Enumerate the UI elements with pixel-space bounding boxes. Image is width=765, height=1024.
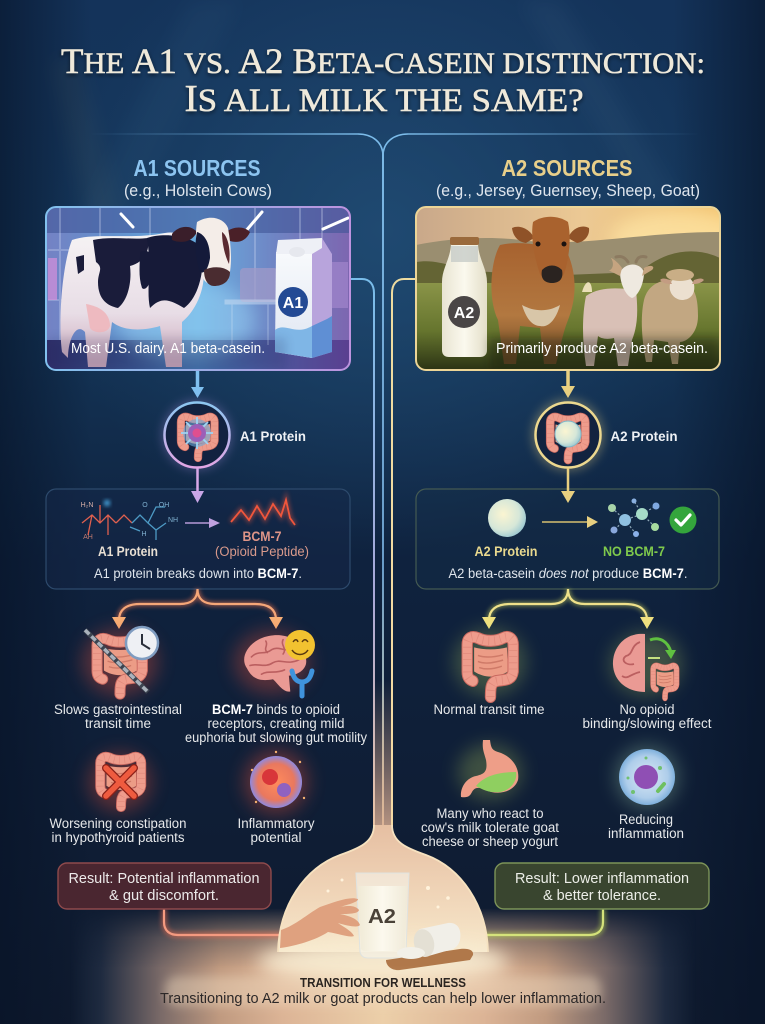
icon: brain and gut no effect bbox=[610, 632, 682, 698]
icon: A1 milk carton: A1 bbox=[283, 295, 303, 312]
caption: Most U.S. dairy. A1 beta-casein. bbox=[71, 340, 265, 357]
icon: healthy cell bbox=[615, 745, 679, 809]
text: slows transit: Slows gastrointestinal bbox=[54, 702, 182, 717]
icon: cheese on board bbox=[386, 923, 473, 970]
icon: A1 protein circle bbox=[162, 400, 232, 470]
chart: A1 molecule: NH bbox=[168, 517, 178, 524]
callout: right result: Result: Lower inflammation bbox=[515, 871, 689, 887]
text: constipation: in hypothyroid patients bbox=[52, 830, 185, 845]
text: no opioid bbox=[582, 702, 712, 731]
icon: intestine with red X bbox=[88, 752, 152, 812]
arrow: A2 panel to protein bbox=[561, 371, 575, 398]
icon: inflammatory cell bbox=[244, 750, 308, 814]
arrow: A1 split branches bbox=[112, 589, 283, 629]
heading and text: transition for wellness: TRANSITION FOR WELLNESS bbox=[300, 976, 466, 990]
heading and text: transition for wellness bbox=[160, 976, 606, 1007]
callout: left result bbox=[58, 863, 271, 909]
transition strip between columns bbox=[374, 680, 392, 850]
panel: A2 sources photo bbox=[416, 207, 750, 370]
arrow: A1 protein to breakdown bbox=[191, 468, 204, 503]
text: constipation: Worsening constipation bbox=[50, 816, 186, 831]
A1 heading bbox=[124, 155, 272, 200]
icon: healthy intestine bbox=[454, 628, 526, 697]
panel: A2 breakdown: A2 Protein bbox=[474, 544, 538, 559]
panel: A1 breakdown: A1 protein breaks down into BCM-7. bbox=[94, 566, 302, 581]
title: IS ALL MILK THE SAME? bbox=[184, 78, 584, 120]
text: inflammatory: Inflammatory bbox=[238, 816, 315, 831]
panel: A2 breakdown: A2 beta-casein does not produce BCM-7. bbox=[448, 566, 688, 581]
top connector and central spine bbox=[90, 134, 700, 848]
icon: milk bottle bbox=[442, 237, 487, 357]
panel: A1 breakdown bbox=[46, 489, 350, 589]
text: no opioid: No opioid bbox=[620, 702, 674, 717]
text: no opioid: binding/slowing effect bbox=[582, 716, 712, 731]
title: THE A1 VS. A2 BETA-CASEIN DISTINCTION: bbox=[61, 41, 705, 81]
callout: right result: & better tolerance. bbox=[543, 888, 661, 904]
icon: goat bbox=[582, 257, 653, 366]
icon: Jersey cow bbox=[491, 217, 589, 364]
icon: A2 protein circle bbox=[532, 399, 604, 471]
text: slows transit: transit time bbox=[85, 716, 151, 731]
chart: A1 molecule: H bbox=[141, 531, 147, 538]
A2 heading bbox=[436, 155, 700, 200]
panel: A1 breakdown: (Opioid Peptide) bbox=[215, 544, 309, 559]
A2 heading: (e.g., Jersey, Guernsey, Sheep, Goat) bbox=[436, 181, 700, 200]
text: slows transit bbox=[54, 702, 182, 731]
text: inflammatory bbox=[238, 816, 315, 845]
callout: right result bbox=[495, 863, 709, 909]
caption: Primarily produce A2 beta-casein. bbox=[496, 340, 708, 357]
text: many tolerate: Many who react to bbox=[436, 806, 544, 821]
icon: A2 milk glass: A2 bbox=[368, 906, 396, 928]
text: BCM-7 binds: euphoria but slowing gut motility bbox=[185, 730, 367, 745]
chart: A1 molecule: O bbox=[142, 502, 148, 509]
text: BCM-7 binds: receptors, creating mild bbox=[208, 716, 344, 731]
arrow: left result to dome bbox=[164, 909, 282, 935]
label: A1 Protein: A1 Protein bbox=[240, 429, 306, 444]
icon: no BCM-7 molecules bbox=[608, 498, 660, 537]
A1 heading: A1 SOURCES bbox=[134, 155, 260, 181]
arrow: A2 protein to breakdown bbox=[561, 468, 575, 503]
arrow bbox=[185, 518, 220, 528]
text: BCM-7 binds bbox=[185, 702, 367, 745]
panel: A2 breakdown bbox=[416, 489, 719, 589]
panel: A1 sources photo bbox=[46, 207, 350, 370]
connector: A2 panel to dome bbox=[392, 279, 416, 835]
icon: sheep bbox=[642, 269, 704, 364]
panel: A2 breakdown: NO BCM-7 bbox=[603, 544, 665, 559]
text: many tolerate: cow's milk tolerate goat bbox=[421, 820, 559, 835]
heading and text: transition for wellness: Transitioning to A2 milk or goat products can help lower inflammation. bbox=[160, 990, 606, 1007]
title bbox=[61, 41, 705, 120]
panel: A1 breakdown: BCM-7 bbox=[242, 529, 282, 544]
panel: wellness dome bbox=[258, 825, 508, 984]
arrow: A1 panel to protein bbox=[191, 371, 204, 398]
text: reducing bbox=[608, 812, 684, 841]
label: A2 Protein: A2 Protein bbox=[610, 429, 678, 444]
text: reducing: Reducing bbox=[619, 812, 673, 827]
icon: A2 milk glass bbox=[356, 873, 409, 958]
chart: A1 molecule: H₂N bbox=[81, 502, 93, 509]
A2 heading: A2 SOURCES bbox=[502, 155, 632, 181]
text: constipation bbox=[50, 816, 186, 845]
callout: left result: Result: Potential inflammation bbox=[68, 871, 260, 887]
text: many tolerate bbox=[421, 806, 559, 849]
icon: brain with smile and receptor bbox=[234, 630, 315, 696]
chart: A1 molecule bbox=[81, 500, 178, 541]
text: reducing: inflammation bbox=[608, 826, 684, 841]
icon: green check bbox=[670, 506, 696, 534]
text: many tolerate: cheese or sheep yogurt bbox=[422, 834, 558, 849]
icon: Holstein cow bbox=[60, 218, 250, 367]
chart: A1 molecule: OH bbox=[159, 502, 169, 509]
chart: A1 molecule: AH bbox=[83, 534, 93, 541]
arrow: right result to dome bbox=[485, 909, 603, 935]
arrow bbox=[542, 516, 598, 528]
text: normal transit: Normal transit time bbox=[434, 702, 544, 717]
callout: left result: & gut discomfort. bbox=[109, 888, 219, 904]
icon: A2 protein sphere bbox=[488, 499, 526, 537]
A1 heading: (e.g., Holstein Cows) bbox=[124, 181, 272, 200]
icon: milk bottle: A2 bbox=[454, 305, 474, 322]
icon: intestine with chain and clock bbox=[82, 627, 158, 696]
text: BCM-7 binds: BCM-7 binds to opioid bbox=[212, 702, 340, 717]
icon: reaching hand bbox=[280, 898, 360, 948]
icon: A1 milk carton bbox=[275, 238, 332, 358]
icon: BCM-7 zigzag bbox=[231, 500, 295, 525]
icon: stomach bbox=[458, 740, 522, 800]
arrow: A2 split branches bbox=[482, 589, 654, 629]
text: inflammatory: potential bbox=[250, 830, 302, 845]
panel: A1 breakdown: A1 Protein bbox=[98, 544, 158, 559]
connector: A1 panel to dome bbox=[350, 279, 374, 835]
